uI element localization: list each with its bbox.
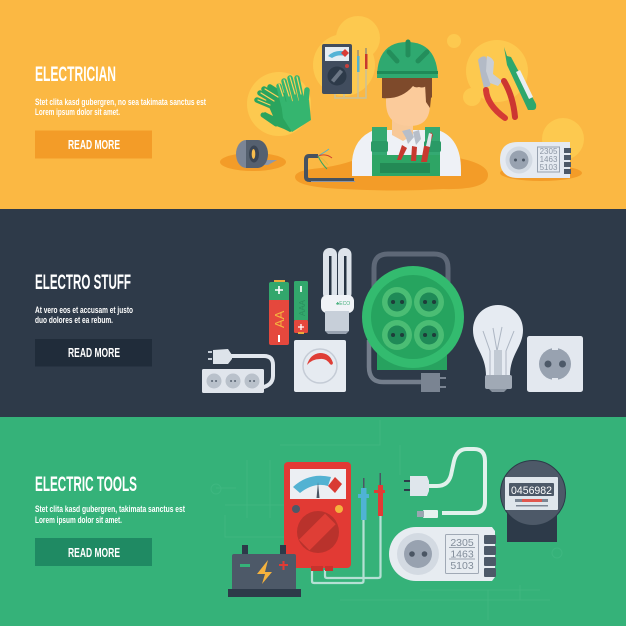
- icon: red multimeter: [284, 462, 385, 583]
- icon: extension cord: [202, 349, 273, 393]
- text block: electric tools description: Stet clita kasd gubergren, takimata sanctus est: [35, 504, 185, 514]
- icon: electrical tape: [220, 140, 286, 171]
- icon: socket power meter: 5103: [540, 163, 558, 172]
- button: read more: [35, 339, 152, 366]
- panel: electro stuff: [0, 209, 626, 417]
- icon: electricity meter: 0456982: [511, 485, 552, 497]
- icon: pliers and voltage tester: [447, 34, 536, 118]
- button: read more: READ MORE: [68, 137, 120, 152]
- text block: electrician description: [35, 97, 206, 117]
- icon: CFL eco lamp: ♣ECO: [336, 301, 350, 307]
- icon: AA battery: AA: [272, 310, 287, 328]
- icon: electricity meter: [500, 460, 566, 542]
- icon: AAA battery: [294, 281, 308, 334]
- icon: cable reel: [362, 254, 464, 392]
- icon: socket power meter: 5103: [450, 560, 474, 572]
- text block: electro stuff description: duo dolores et ea rebum.: [35, 315, 113, 325]
- icon: AAA battery: AAA: [298, 299, 307, 316]
- heading: electro stuff: ELECTRO STUFF: [35, 271, 131, 294]
- panel: electric tools: [0, 417, 626, 626]
- text block: electro stuff description: [35, 305, 133, 325]
- icon: socket power meter: 1463: [450, 548, 474, 560]
- icon: cable: [306, 149, 355, 182]
- button: read more: READ MORE: [68, 345, 120, 360]
- text block: electrician description: Lorem ipsum dolor sit amet.: [35, 107, 120, 117]
- icon: light bulb: [473, 305, 523, 392]
- icon: socket power meter: [500, 118, 584, 181]
- text block: electrician description: Stet clita kasd gubergren, no sea takimata sanctus est: [35, 97, 206, 107]
- button: read more: READ MORE: [68, 545, 120, 560]
- icon: gloves: [247, 72, 311, 136]
- icon: socket power meter: 2305: [540, 147, 558, 156]
- icon: multimeter: [313, 16, 380, 98]
- text block: electric tools description: [35, 504, 185, 525]
- ground shadow: worker: [295, 156, 488, 190]
- button: read more: [35, 538, 152, 566]
- icon: wall socket: [527, 336, 583, 392]
- icon: socket power meter: 2305: [450, 537, 474, 549]
- text block: electric tools description: Lorem ipsum dolor sit amet.: [35, 515, 122, 525]
- icon: dimmer switch: [294, 340, 346, 392]
- heading: electrician: ELECTRICIAN: [35, 63, 116, 86]
- heading: electric tools: ELECTRIC TOOLS: [35, 473, 137, 496]
- icon: AA battery: [269, 280, 289, 345]
- text block: electro stuff description: At vero eos et accusam et justo: [35, 305, 133, 315]
- icon: plug and usb cable: [404, 449, 485, 518]
- icon: battery: [228, 545, 301, 597]
- icon: CFL eco lamp: [321, 248, 354, 334]
- button: read more: [35, 130, 152, 158]
- icon: socket power meter: [389, 527, 496, 581]
- icon: socket power meter: 1463: [540, 155, 558, 164]
- figure: electrician worker: [352, 42, 461, 176]
- panel: electrician: [0, 0, 626, 209]
- background circuit lines: [211, 420, 562, 620]
